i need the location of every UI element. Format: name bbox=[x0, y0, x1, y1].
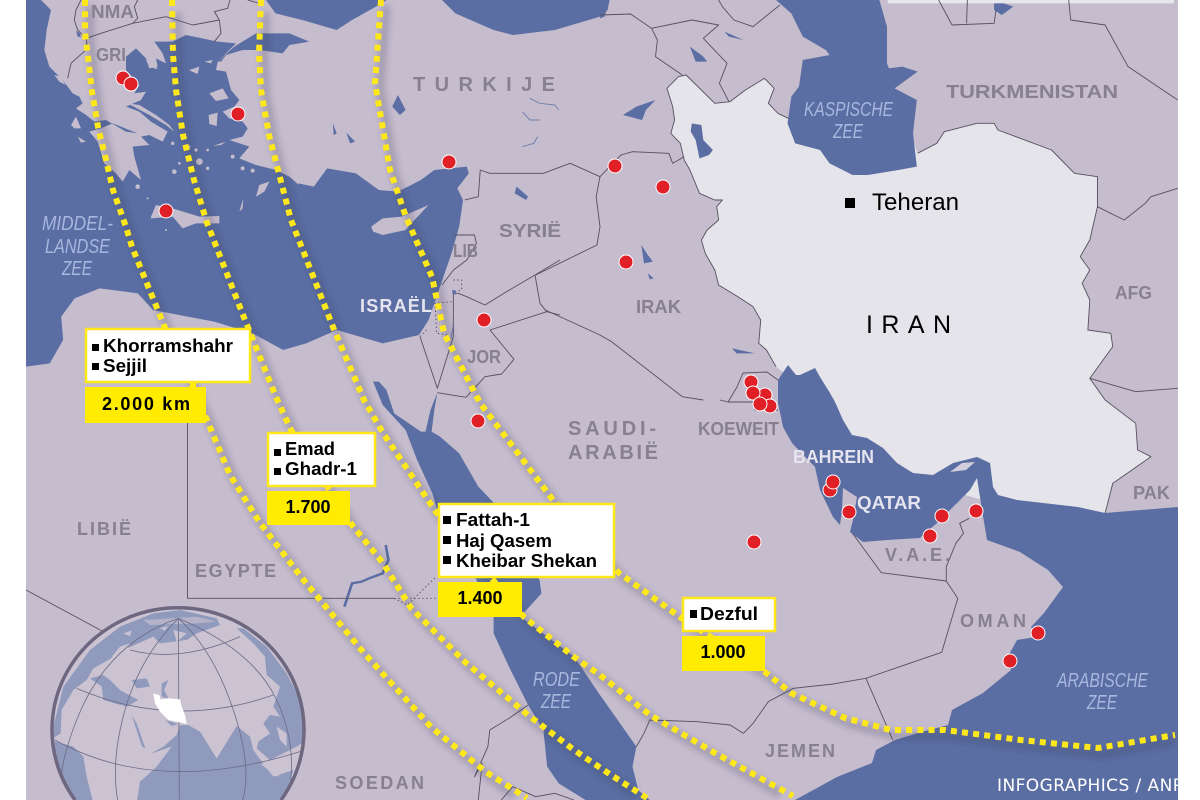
label box: Khorramshahr, Sejjil: Sejjil bbox=[103, 355, 147, 376]
globe land details bbox=[112, 617, 297, 777]
label box: Fattah-1, Haj Qasem, Kheibar Shekan: Fattah-1 bbox=[456, 509, 530, 530]
sea: Red Sea and gulfs bbox=[373, 382, 650, 800]
country labels: JEMEN bbox=[765, 741, 835, 761]
sea: eastern Mediterranean bbox=[26, 167, 469, 367]
sea labels: ZEE bbox=[832, 121, 864, 143]
graticule bbox=[55, 618, 300, 800]
range curve: 1700 km bbox=[172, 0, 647, 798]
country labels: LIBIË bbox=[77, 519, 131, 539]
country labels: V.A.E. bbox=[885, 545, 950, 565]
sea labels: KASPISCHE bbox=[804, 99, 894, 121]
highlighted country labels on sea: BAHREIN bbox=[793, 447, 874, 467]
label box: Fattah-1, Haj Qasem, Kheibar Shekan bbox=[439, 504, 614, 577]
range curve: 2000 km bbox=[85, 0, 527, 798]
highlighted country labels on sea bbox=[360, 296, 921, 513]
sea labels bbox=[42, 99, 1149, 714]
capital marker: Teheran bbox=[845, 192, 958, 210]
label box: Fattah-1, Haj Qasem, Kheibar Shekan: Haj Qasem bbox=[456, 530, 552, 551]
country labels: LIB bbox=[453, 241, 478, 261]
Kuwait border bbox=[720, 372, 778, 402]
country labels: IRAK bbox=[636, 297, 681, 317]
sea labels: ARABISCHE bbox=[1056, 670, 1149, 692]
Jordan and Levant borders bbox=[420, 260, 560, 397]
label box: Fattah-1, Haj Qasem, Kheibar Shekan: Kheibar Shekan bbox=[456, 550, 597, 571]
Gulf islands bbox=[950, 462, 975, 472]
country labels: OMAN bbox=[960, 611, 1026, 631]
country labels: TURKMENISTAN bbox=[946, 82, 1118, 102]
sea: Aegean, Adriatic and Ionian bbox=[26, 0, 326, 240]
capital marker: Teheran: Teheran bbox=[872, 189, 959, 216]
label box: Khorramshahr, Sejjil: Khorramshahr bbox=[103, 335, 233, 356]
highlighted country labels on sea: QATAR bbox=[857, 493, 921, 513]
country labels: PAK bbox=[1133, 483, 1170, 503]
Balkan borders bbox=[68, 0, 259, 78]
country labels: SAUDI- bbox=[568, 418, 656, 440]
country labels: TURKIJE bbox=[413, 74, 555, 96]
country labels: NMA bbox=[91, 2, 134, 22]
sea labels: ZEE bbox=[61, 258, 93, 280]
label box: Khorramshahr, Sejjil bbox=[86, 329, 250, 382]
country labels: KOEWEIT bbox=[698, 419, 779, 439]
label box: Emad, Ghadr-1 bbox=[268, 433, 375, 486]
label box: Emad, Ghadr-1: Ghadr-1 bbox=[285, 458, 357, 479]
range tag: 1.000: 1.000 bbox=[700, 642, 746, 662]
Cyprus bbox=[371, 205, 429, 235]
locator globe bbox=[50, 608, 307, 800]
lakes bbox=[333, 0, 1013, 353]
range tag: 1.700 bbox=[267, 491, 350, 525]
range tag: 2.000 km bbox=[85, 383, 206, 423]
sea labels: LANDSE bbox=[45, 236, 111, 258]
sea labels: ZEE bbox=[1086, 692, 1118, 714]
Iran territory bbox=[667, 75, 1151, 515]
range tag: 1.000 bbox=[682, 636, 765, 671]
Greek islands bbox=[54, 60, 269, 231]
highlighted country labels on sea: ISRAËL bbox=[360, 296, 432, 316]
range curve: 1000 km bbox=[375, 0, 1175, 748]
country labels: EGYPTE bbox=[195, 561, 276, 581]
country labels: JOR bbox=[467, 347, 501, 367]
label box: Dezful bbox=[683, 598, 775, 631]
sea labels: RODE bbox=[533, 669, 581, 691]
globe oceans bbox=[50, 610, 307, 800]
country labels: SYRIË bbox=[499, 221, 561, 241]
range curve: 1400 km bbox=[259, 0, 793, 796]
sea labels: ZEE bbox=[540, 691, 572, 713]
country title: Iran: IRAN bbox=[866, 311, 951, 339]
sea: Caspian bbox=[776, 0, 918, 175]
label box: Dezful: Dezful bbox=[700, 603, 758, 624]
country labels: ARABIË bbox=[568, 441, 658, 464]
range tag: 1.400 bbox=[438, 582, 522, 617]
sea: Black Sea bbox=[266, 0, 386, 30]
sea: Marmara bbox=[218, 33, 309, 62]
sea labels: MIDDEL- bbox=[42, 213, 113, 235]
range tag: 1.400: 1.400 bbox=[457, 588, 503, 608]
label box: Emad, Ghadr-1: Emad bbox=[285, 438, 335, 459]
range tag: 2.000 km: 2.000 km bbox=[102, 394, 190, 414]
country labels: SOEDAN bbox=[335, 773, 424, 793]
Iran highlighted on globe bbox=[153, 693, 187, 724]
sea: Persian Gulf, Gulf of Oman, Arabian Sea bbox=[778, 365, 1178, 800]
range tag: 1.700: 1.700 bbox=[285, 497, 331, 517]
country labels: GRI bbox=[96, 45, 126, 65]
country labels: AFG bbox=[1115, 283, 1152, 303]
credit: INFOGRAPHICS / ANP bbox=[997, 776, 1183, 796]
top light bar bbox=[888, 0, 1174, 3]
target markers bbox=[116, 71, 1045, 668]
